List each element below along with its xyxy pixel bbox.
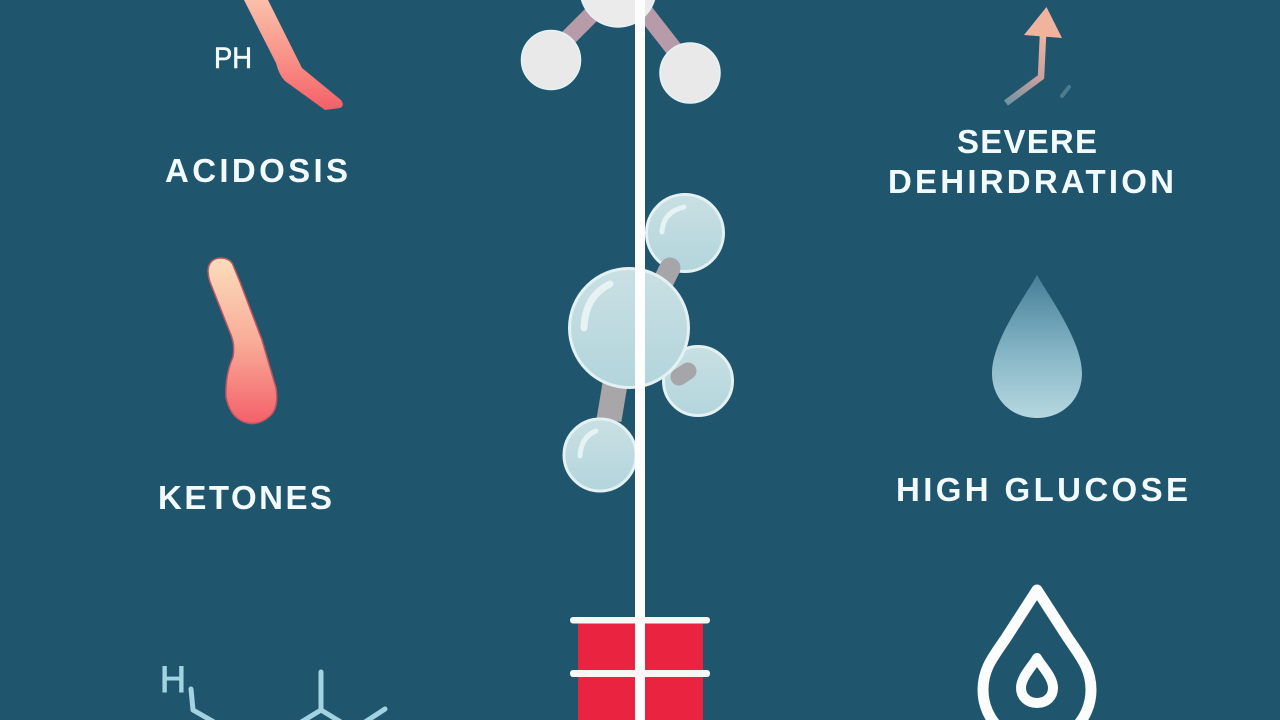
panel: severe dehydration [888,7,1174,200]
highlight [662,207,684,232]
bond: upper right [660,268,670,288]
highlight [580,431,596,456]
icon: rising arrow [1006,7,1069,103]
atom: upper right [646,194,724,272]
heading: severe dehydration: DEHIRDRATION [888,163,1174,200]
heading: high glucose: HIGH GLUCOSE [896,471,1188,508]
red block [578,620,703,720]
atom: lower right [664,346,732,416]
molecule: central blue [564,194,732,491]
atom: lower left [564,419,636,491]
bonds [563,12,677,53]
molecule: top white [522,0,720,103]
block bands [570,617,710,677]
panel: ketones [158,258,332,516]
atoms [580,0,656,27]
heading: ketones: KETONES [158,479,332,516]
heading: acidosis: ACIDOSIS [165,152,348,189]
icon: glucose drop outline [983,590,1091,720]
chemical structure [160,659,385,720]
highlight [584,284,610,328]
pH label: PH [214,42,252,75]
bond stub: lower right [679,371,688,377]
icon: water drop [992,275,1082,418]
atom: main [570,268,688,388]
panel: high glucose [896,275,1188,508]
panel: acidosis [165,0,348,189]
icon: ketone level curve [208,258,277,424]
heading: severe dehydration: SEVERE [957,123,1097,160]
central vertical line [635,0,645,720]
structure bonds [191,672,385,720]
hydrogen label: H [160,659,186,700]
heading: severe dehydration [888,123,1174,200]
icon: falling pH curve [244,0,343,110]
bond: lower left [609,378,616,420]
